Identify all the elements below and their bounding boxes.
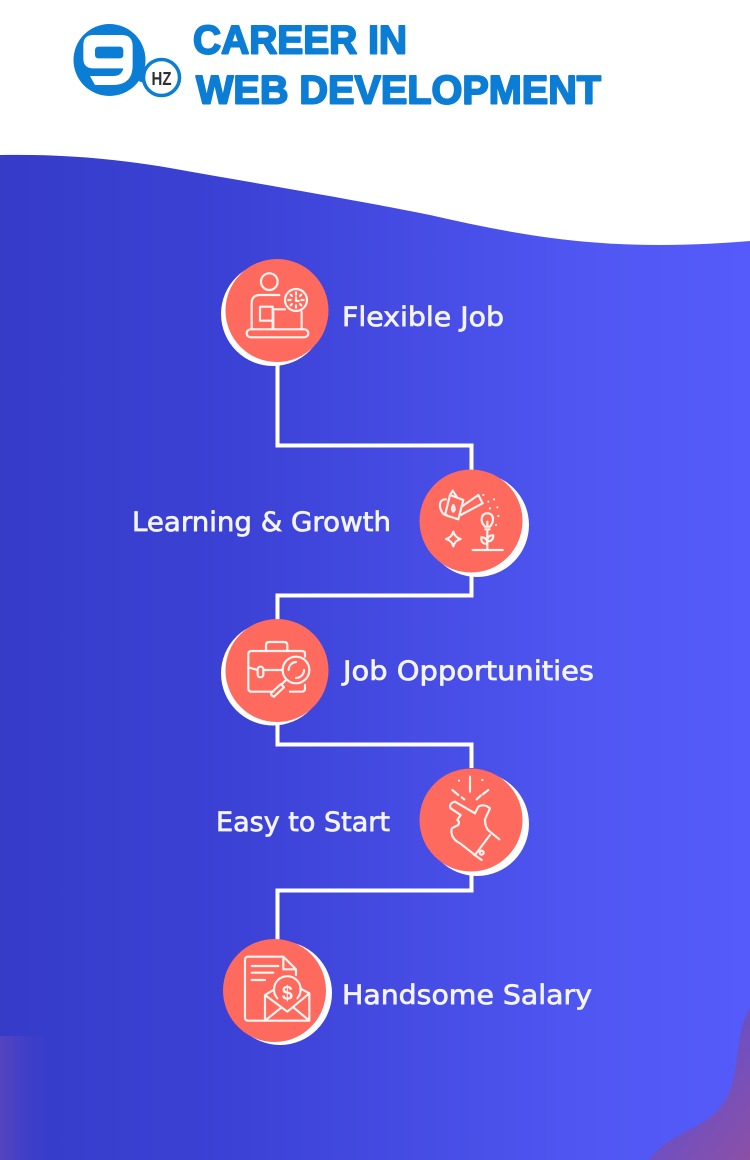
icon: briefcase with magnifier <box>248 642 309 697</box>
label: Easy to Start <box>216 807 390 838</box>
label: Job Opportunities <box>341 656 594 687</box>
icon: dollar sign: $ <box>282 983 293 1005</box>
step 1: flexible job <box>221 259 504 366</box>
icon: person with laptop and clock <box>247 273 308 337</box>
icon: snapping fingers <box>450 777 499 860</box>
step 3: job opportunities <box>221 619 594 726</box>
title: WEB DEVELOPMENT <box>196 68 601 112</box>
icon: document and salary envelope <box>245 957 309 1021</box>
label: Learning & Growth <box>132 507 391 538</box>
step 4: easy to start <box>216 768 529 876</box>
icon: watering can and bulb plant <box>440 491 503 550</box>
logo <box>74 24 180 96</box>
logo: HZ <box>152 69 172 89</box>
step 5: handsome salary <box>223 939 592 1045</box>
bottom left purple glow <box>0 1036 48 1160</box>
title <box>193 18 601 112</box>
connector path <box>278 362 472 940</box>
step 2: learning and growth <box>132 470 529 577</box>
label: Flexible Job <box>342 302 504 333</box>
title: CAREER IN <box>193 18 407 62</box>
label: Handsome Salary <box>342 980 592 1011</box>
bottom right purple blob <box>648 1008 750 1160</box>
